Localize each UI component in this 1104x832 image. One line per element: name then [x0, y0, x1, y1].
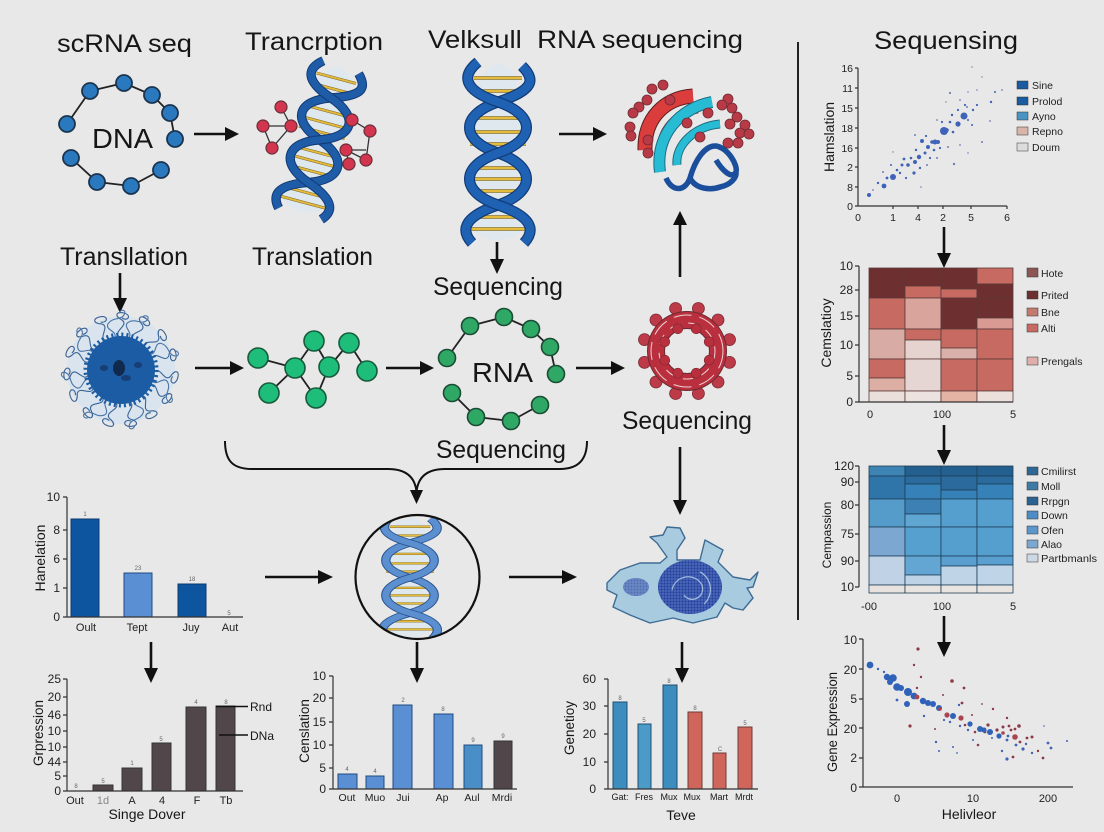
legend: scatter: Sine [1032, 80, 1053, 92]
bar chart: Hanelation: 1 [53, 581, 60, 595]
scatter plot: Hamslation: 1 [890, 212, 896, 224]
legend: red chart: Hote [1041, 268, 1063, 280]
bar chart: Censlation: 9 [501, 734, 505, 740]
stacked chart: red Cemslatioy: 28 [840, 283, 853, 297]
bar chart: Grpression: 0 [54, 784, 61, 798]
bar chart: Grpression: 8 [74, 784, 78, 790]
stacked chart: red Cemslatioy [818, 259, 1082, 421]
bar chart: Censlation: 10 [313, 738, 326, 752]
stacked chart: blue Cempassion: 10 [841, 580, 854, 594]
bar chart: Hanelation: 10 [47, 490, 60, 504]
legend: red chart: Alti [1041, 323, 1056, 335]
legend: blue chart: Partbmanls [1041, 553, 1097, 565]
bar chart: Genetioy: Mrdt [735, 792, 753, 802]
arrow: blob down to Genetioy chart [675, 642, 689, 683]
heading: Transllation: Transllation [60, 243, 188, 271]
arrow: chart down to Grpression chart [144, 642, 158, 683]
legend: scatter: Prolod [1032, 96, 1063, 108]
bar chart: Hanelation: 5 [227, 611, 231, 617]
stacked chart: red Cemslatioy: 5 [1010, 409, 1016, 421]
stacked chart: blue Cempassion: 75 [841, 527, 854, 541]
callout: Rnd [216, 700, 272, 714]
heading: Translation: Translation [252, 243, 373, 271]
arrow: network to RNA [386, 361, 434, 375]
scatter plot: Hamslation: 18 [841, 123, 853, 135]
arrow: Transllation down to cell [113, 273, 127, 313]
stacked chart: blue Cempassion: 100 [933, 601, 951, 613]
scatter plot: Hamslation: 11 [842, 83, 853, 95]
scatter plot: Gene Expression: 10 [844, 633, 857, 647]
bar chart: Censlation: Mrdi [492, 792, 512, 804]
arrow: circle down to Censlation chart [410, 642, 424, 683]
label: DNA: DNA [92, 123, 153, 154]
callout: DNa [219, 729, 274, 743]
legend: blue chart: Alao [1041, 539, 1062, 551]
bar chart: Grpression: 1d [97, 795, 109, 807]
stacked chart: red Cemslatioy: 15 [840, 309, 853, 323]
bar chart: Grpression: Tb [220, 795, 232, 807]
bar chart: Censlation: 0 [319, 782, 326, 796]
bar chart: Genetioy: Mart [710, 792, 728, 802]
scatter plot: Gene Expression: 10 [967, 793, 979, 805]
bar chart: Censlation: 5 [319, 761, 326, 775]
bar chart: Grpression: 10 [48, 724, 61, 738]
bar chart: Genetioy: 20 [583, 727, 596, 741]
arrow: ring up to ribbon structure [673, 211, 687, 277]
bar chart: Genetioy: Fres [635, 792, 654, 802]
scatter plot: Gene Expression: 5 [850, 692, 857, 706]
icon: blue spiky cell [61, 310, 179, 430]
axis title: Grpression: Grpression [31, 700, 46, 766]
arrow: red chart down to blue chart [937, 425, 951, 465]
bar chart: Grpression: 8 [224, 700, 228, 706]
bar chart: Hanelation: 1 [83, 512, 87, 518]
stacked chart: blue Cempassion: -00 [861, 601, 877, 613]
bar chart: Hanelation: Aut [222, 622, 238, 634]
bar chart: Genetioy: Gat: [611, 792, 629, 802]
bar chart: Censlation: Out [339, 792, 356, 804]
bar chart: Censlation: Muo [365, 792, 385, 804]
icon: DNA bead chain [59, 75, 183, 194]
stacked chart: blue Cempassion: 90 [841, 475, 854, 489]
arrow: Sequencing down to blob [673, 447, 687, 515]
arrow: chart to circle [265, 570, 333, 584]
scatter plot: Hamslation: 0 [847, 201, 853, 213]
bar chart: Genetioy: 5 [743, 721, 747, 727]
bar chart: Censlation: 8 [441, 707, 445, 713]
stacked chart: blue Cempassion [820, 459, 1097, 613]
axis title: Hanelation: Hanelation [32, 525, 48, 591]
bar chart: Censlation: 4 [373, 769, 377, 775]
bar chart: Genetioy: 8 [693, 706, 697, 712]
icon: red ring [638, 302, 736, 400]
legend: scatter: Ayno [1032, 111, 1056, 123]
legend: blue chart [1027, 466, 1097, 565]
scatter plot: Hamslation: 0 [855, 212, 861, 224]
arrow: bracket merging into circle [225, 441, 587, 504]
legend: red chart: Prengals [1041, 356, 1082, 368]
legend: blue chart: Moll [1041, 481, 1060, 493]
label: Sequencing under helix: Sequencing [433, 273, 563, 301]
bar chart: Grpression: Out [66, 795, 84, 807]
icon: transcription helix with red molecules [257, 58, 376, 221]
bar chart: Hanelation: 18 [189, 577, 196, 583]
axis title: Cempassion: Cempassion [820, 502, 834, 568]
arrow: helix to ribbon structure [559, 127, 607, 141]
bar chart: Grpression: 25 [48, 672, 61, 686]
stacked chart: blue Cempassion: 80 [841, 498, 854, 512]
arrow: scatter down to red heatmap [937, 227, 951, 268]
bar chart: Censlation [297, 669, 517, 804]
bar chart: Censlation: 4 [345, 767, 349, 773]
arrow: circle to blob [509, 570, 577, 584]
heading: scRNA seq: scRNA seq [57, 30, 192, 58]
scatter plot: Hamslation: 2 [940, 212, 946, 224]
bar chart: Censlation: Jui [396, 792, 410, 804]
scatter plot: Hamslation [821, 63, 1063, 224]
bar chart: Hanelation [32, 490, 243, 634]
stacked chart: red Cemslatioy: 0 [867, 409, 873, 421]
axis title: Singe Dover: Singe Dover [108, 806, 186, 822]
bar chart: Grpression: 5 [101, 779, 105, 785]
heading: Velksull RNA sequencing: Velksull RNA sequencing [428, 26, 743, 54]
bar chart: Genetioy: Mux [683, 792, 701, 802]
bar chart: Grpression: F [194, 795, 201, 807]
bar chart: Grpression: 46 [48, 708, 61, 722]
icon: helix in circle [356, 515, 480, 639]
scatter plot: Hamslation: 16 [841, 143, 853, 155]
scatter plot: Hamslation: 2 [847, 162, 853, 174]
bar chart: Censlation: Ap [436, 792, 449, 804]
bar chart: Grpression [31, 672, 274, 822]
icon: folded protein ribbon [625, 80, 754, 189]
axis title: Teve: Teve [666, 807, 696, 823]
bar chart: Hanelation: 8 [53, 523, 60, 537]
stacked chart: red Cemslatioy: 10 [840, 259, 853, 273]
arrow: RNA to ring [576, 361, 625, 375]
bar chart: Grpression: 20 [48, 690, 61, 704]
axis title: Hamslation: Hamslation [821, 102, 837, 172]
scatter plot: Gene Expression: 0 [894, 793, 900, 805]
scatter plot: Hamslation: 6 [1004, 212, 1010, 224]
legend: scatter: Repno [1032, 126, 1063, 138]
bar chart: Grpression: 1 [130, 761, 134, 767]
bar chart: Hanelation: 0 [53, 610, 60, 624]
bar chart: Grpression: 4 [194, 700, 198, 706]
bar chart: Censlation: 10 [313, 669, 326, 683]
bar chart: Hanelation: Tept [127, 622, 147, 634]
scatter plot: Hamslation: 8 [847, 182, 853, 194]
stacked chart: blue Cempassion: 90 [841, 554, 854, 568]
label: Sequencing under ring: Sequencing [622, 407, 752, 435]
bar chart: Genetioy: 0 [589, 782, 596, 796]
legend: blue chart: Down [1041, 510, 1068, 522]
label: RNA: RNA [472, 357, 533, 388]
bar chart: Grpression: 10 [48, 740, 61, 754]
icon: blue blob cell [607, 527, 758, 623]
bar chart: Genetioy: 5 [642, 718, 646, 724]
bar chart: Genetioy: 60 [583, 672, 596, 686]
icon: central DNA double helix [466, 62, 530, 243]
bar chart: Genetioy: Mux [660, 792, 678, 802]
bar chart: Genetioy: 10 [583, 755, 596, 769]
legend: blue chart: Ofen [1041, 525, 1064, 537]
icon: green network [248, 331, 377, 408]
heading: Sequensing: Sequensing [874, 27, 1018, 55]
axis title: Gene Expression: Gene Expression [824, 672, 840, 772]
bar chart: Hanelation: Oult [76, 622, 96, 634]
bar chart: Genetioy: 8 [618, 696, 622, 702]
scatter plot: Hamslation: 5 [968, 212, 974, 224]
legend: blue chart: Rrpgn [1041, 496, 1070, 508]
stacked chart: red Cemslatioy: 10 [840, 338, 853, 352]
bar chart: Censlation: Aul [464, 792, 480, 804]
bar chart: Censlation: 9 [471, 738, 475, 744]
arrow: helix down to Sequencing [490, 242, 504, 274]
arrow: DNA to transcription [194, 127, 239, 141]
stacked chart: red Cemslatioy: 100 [933, 409, 951, 421]
arrow: cell to network [195, 361, 244, 375]
bar chart: Grpression: A [128, 795, 136, 807]
bar chart: Genetioy: 8 [667, 679, 671, 685]
stacked chart: red Cemslatioy: 5 [846, 369, 853, 383]
bar chart: Censlation: 20 [313, 691, 326, 705]
legend: red chart [1027, 268, 1082, 368]
scatter plot: Gene Expression [824, 633, 1073, 822]
scatter plot: Gene Expression: 2 [850, 751, 857, 765]
bar chart: Grpression: 44 [48, 755, 61, 769]
callout: DNa: DNa [250, 729, 274, 743]
bar chart: Grpression: 5 [54, 769, 61, 783]
legend: scatter [1017, 80, 1063, 154]
scatter plot: Gene Expression: 200 [1039, 793, 1057, 805]
bar chart: Censlation: 2 [401, 698, 405, 704]
scatter plot: Gene Expression: 0 [850, 781, 857, 795]
scatter plot: Hamslation: 16 [841, 63, 853, 75]
bar chart: Hanelation: 23 [135, 566, 142, 572]
bar chart: Genetioy: 30 [583, 699, 596, 713]
scatter plot: Hamslation: 15 [841, 103, 853, 115]
axis title: Cemslatioy: Cemslatioy [818, 298, 834, 368]
icon: RNA bead chain [438, 308, 564, 430]
scatter plot: Gene Expression: 20 [844, 722, 857, 736]
stacked chart: red Cemslatioy: 0 [846, 395, 853, 409]
bar chart: Hanelation: Juy [182, 622, 200, 634]
legend: red chart: Prited [1041, 290, 1069, 302]
legend: red chart: Bne [1041, 307, 1060, 319]
arrow: blue chart down to scatter [937, 616, 951, 657]
bar chart: Censlation: 15 [313, 715, 326, 729]
legend: scatter: Doum [1032, 142, 1060, 154]
label: Sequencing under RNA: Sequencing [436, 436, 566, 464]
divider [797, 42, 799, 620]
legend: blue chart: Cmilirst [1041, 466, 1076, 478]
stacked chart: blue Cempassion: 5 [1010, 601, 1016, 613]
bar chart: Grpression: 5 [159, 737, 163, 743]
stacked chart: blue Cempassion: 120 [834, 459, 854, 473]
axis title: Censlation: Censlation [297, 699, 312, 763]
bar chart: Genetioy [562, 672, 758, 823]
heading: Trancrption: Trancrption [245, 28, 383, 56]
bar chart: Genetioy: C [718, 747, 723, 753]
axis title: Genetioy: Genetioy [562, 701, 577, 755]
bar chart: Grpression: 4 [159, 795, 165, 807]
bar chart: Hanelation: 6 [53, 552, 60, 566]
scatter plot: Hamslation: 4 [915, 212, 921, 224]
scatter plot: Gene Expression: 20 [844, 663, 857, 677]
axis title: Helivleor: Helivleor [942, 806, 997, 822]
callout: Rnd: Rnd [250, 700, 272, 714]
